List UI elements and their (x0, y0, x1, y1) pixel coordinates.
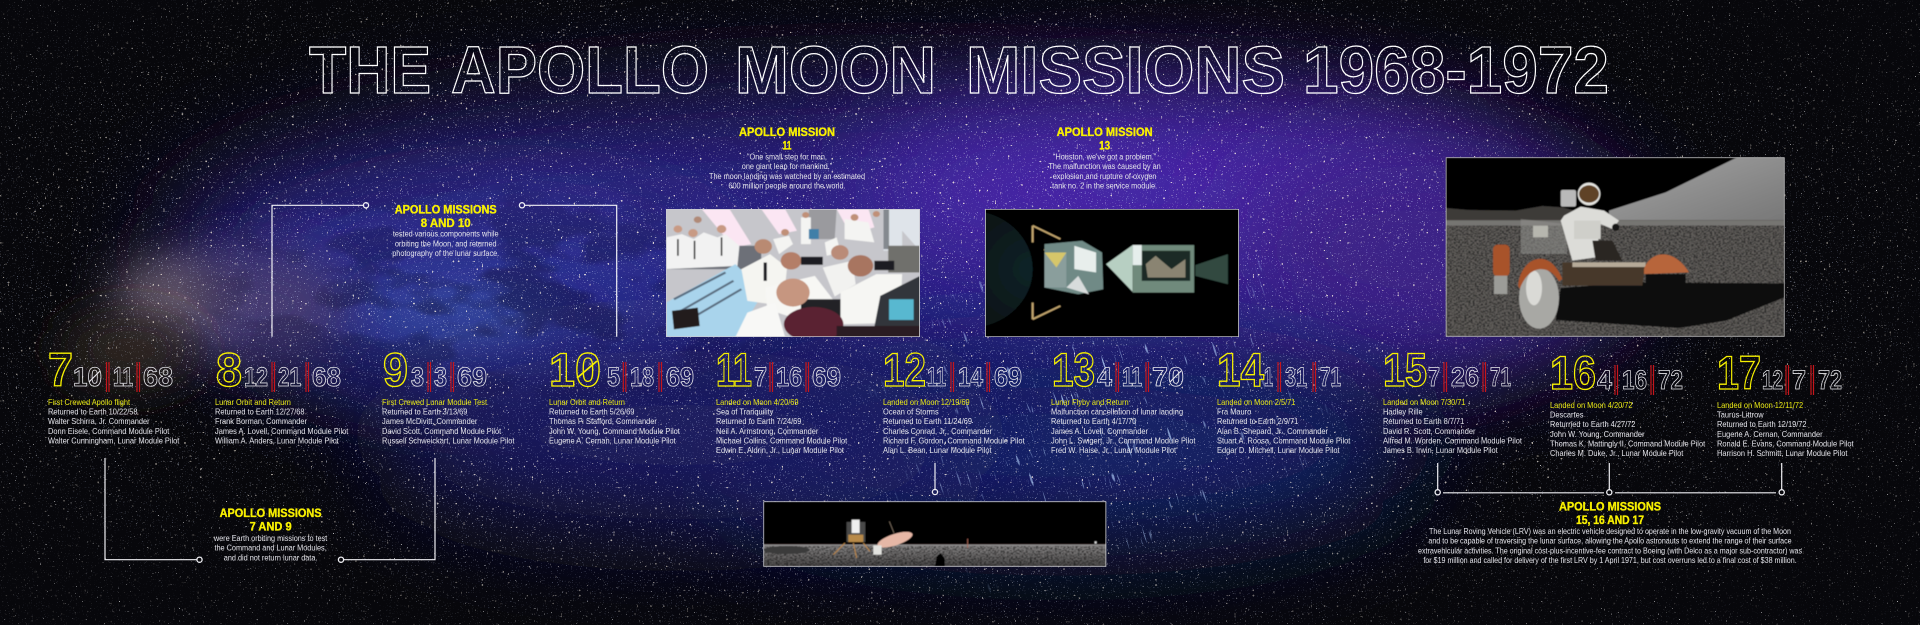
mission 9: David Scott, Command Module Pilot (382, 426, 502, 436)
mission 12: Landed on Moon 12/19/69 (883, 397, 970, 407)
mission 17: 17 (1717, 346, 1761, 399)
callout: Apollo mission 11: one giant leap for mankind.” (742, 162, 832, 171)
mission 13: Returned to Earth 4/17/70 (1051, 417, 1137, 426)
mission 7: 7 (48, 343, 73, 396)
mission 10: 18 (630, 362, 654, 392)
mission 12: 69 (994, 362, 1022, 392)
mission 8: William A. Anders, Lunar Module Pilot (215, 436, 339, 446)
mission 14: Returned to Earth 2/9/71 (1217, 417, 1299, 426)
mission 12: Returned to Earth 11/24/69 (883, 417, 972, 426)
callout: Apollo mission 11: 11 (782, 139, 792, 152)
callout: Apollo mission 13: explosion and rupture of oxygen (1053, 171, 1156, 181)
mission 16: Thomas K. Mattingly II, Command Module Pilot (1550, 439, 1706, 449)
mission 12: Charles Conrad, Jr., Commander (883, 426, 992, 436)
mission 15: Alfred M. Worden, Command Module Pilot (1383, 436, 1523, 446)
mission 14: 71 (1320, 362, 1341, 392)
mission 14: 1 (1264, 362, 1273, 392)
mission 10 (549, 343, 694, 446)
mission 12: 11 (927, 362, 946, 392)
mission 11 (716, 343, 848, 455)
mission 9: James McDivitt, Commander (382, 417, 478, 426)
callout: Apollo missions 15, 16 and 17: The Lunar Roving Vehicle (LRV) was an electric vehicle designed to operate in the low-gravity vacuum of the Moon (1429, 526, 1791, 536)
mission 10: 69 (666, 362, 694, 392)
mission 8: Frank Borman, Commander (215, 417, 307, 426)
mission 17: Harrison H. Schmitt, Lunar Module Pilot (1717, 448, 1848, 458)
mission 9: First Crewed Lunar Module Test (382, 397, 488, 407)
connector: missions 8 and 10 (272, 203, 617, 337)
mission 13: Fred W. Haise, Jr., Lunar Module Pilot (1051, 445, 1177, 455)
mission 11: Sea of Tranquility (716, 407, 774, 417)
mission 16: 4 (1597, 365, 1612, 395)
mission 16: Returned to Earth 4/27/72 (1550, 420, 1636, 429)
callout: Apollo mission 11: APOLLO MISSION (739, 126, 835, 139)
callout: Apollo mission 11: “One small step for man, (747, 152, 827, 162)
mission 15: Returned to Earth 8/7/71 (1383, 417, 1465, 426)
photo: astronaut on lunar rover (1446, 157, 1785, 337)
mission 13: James A. Lovell, Commander (1051, 426, 1148, 436)
mission 15: James B. Irwin, Lunar Module Pilot (1383, 445, 1498, 455)
mission 7: 11 (113, 362, 133, 392)
mission 17: 7 (1792, 365, 1806, 395)
mission 12: 14 (958, 362, 983, 392)
mission 7: Returned to Earth 10/22/58 (48, 407, 138, 417)
callout: Apollo missions 7 and 9: and did not return lunar data. (224, 553, 317, 562)
mission 14: 31 (1285, 362, 1307, 392)
mission 9: 9 (383, 343, 408, 396)
mission 7: Walter Cunningham, Lunar Module Pilot (48, 436, 180, 446)
title: 1968-1972 (1303, 33, 1609, 108)
mission 15: 15 (1383, 343, 1427, 396)
title: THE (309, 33, 431, 108)
mission 17: 72 (1818, 365, 1842, 395)
connector: missions 7 and 9 (105, 458, 435, 562)
mission 8 (215, 343, 349, 446)
mission 14: Fra Mauro (1217, 407, 1252, 417)
mission 17: Returned to Earth 12/19/72 (1717, 420, 1807, 429)
mission 7: First Crewed Apollo flight (48, 397, 131, 407)
mission 16 (1550, 346, 1706, 458)
mission 17: Eugene A. Cernan, Commander (1717, 429, 1823, 439)
mission 8: 12 (244, 362, 268, 392)
mission 12: Richard F. Gordon, Command Module Pilot (883, 436, 1025, 446)
mission 15: Landed on Moon 7/30/71 (1383, 397, 1466, 407)
callout: Apollo mission 13: APOLLO MISSION (1057, 126, 1153, 139)
mission 7: Walter Schirra, Jr. Commander (48, 417, 150, 426)
mission 9 (382, 343, 515, 446)
mission 16: 16 (1622, 365, 1647, 395)
mission 13: 11 (1122, 362, 1142, 392)
mission 9: Russell Schweickart, Lunar Module Pilot (382, 436, 515, 446)
callout: Apollo missions 8 and 10: tested various components while (393, 229, 499, 239)
mission 12 (883, 343, 1025, 455)
callout: Apollo missions 7 and 9: were Earth orbiting missions to test (213, 533, 328, 543)
mission 16: 16 (1550, 346, 1596, 399)
callout: Apollo missions 15, 16 and 17 (1418, 500, 1802, 565)
callout: Apollo missions 8 and 10: photography of the lunar surface. (392, 249, 499, 258)
mission 11: Returned to Earth 7/24/69 (716, 417, 802, 426)
mission 9: 3 (411, 362, 424, 392)
callout: Apollo missions 15, 16 and 17: for $19 million and called for delivery of the first LRV by 1 April 1971, but cost overruns led to a final cost of $38 million. (1423, 555, 1797, 565)
mission 16: Descartes (1550, 410, 1583, 420)
callout: Apollo mission 13: tank no. 2 in the service module. (1052, 181, 1157, 191)
mission 8: James A. Lovell, Command Module Pilot (215, 426, 349, 436)
callout: Apollo missions 8 and 10: 8 AND 10 (421, 217, 471, 230)
mission 16: Charles M. Duke, Jr., Lunar Module Pilot (1550, 448, 1684, 458)
mission 11: Landed on Moon 4/20/69 (716, 397, 799, 407)
connector: missions 15, 16 and 17 (1435, 463, 1784, 495)
mission 14: Edgar D. Mitchell, Lunar Module Pilot (1217, 445, 1340, 455)
mission 13: 13 (1052, 343, 1095, 396)
mission 7: 68 (143, 362, 173, 392)
callout: Apollo mission 11: 600 million people around the world. (728, 181, 846, 191)
callout: Apollo missions 15, 16 and 17: APOLLO MISSIONS (1559, 500, 1661, 513)
mission 15: 71 (1490, 362, 1511, 392)
title: MISSIONS (966, 33, 1285, 108)
mission 11: Edwin E. Aldrin, Jr., Lunar Module Pilot (716, 445, 845, 455)
mission 14: 14 (1217, 343, 1264, 396)
mission 16: John W. Young, Commander (1550, 429, 1645, 439)
mission 15: 26 (1451, 362, 1479, 392)
mission 10: Returned to Earth 5/26/69 (549, 407, 635, 417)
mission 13: 4 (1097, 362, 1112, 392)
callout: Apollo missions 15, 16 and 17: and to be capable of traversing the lunar surface, allowing the Apollo astronauts to extend the range of their surface (1428, 536, 1792, 546)
mission 13: Malfunction cancellation of lunar landing (1051, 407, 1183, 417)
mission 13: 70 (1152, 362, 1184, 392)
photo: Apollo spacecraft illustration (985, 209, 1239, 337)
mission 7 (48, 343, 180, 446)
mission 17: Taurus-Littrow (1717, 410, 1764, 420)
mission 12: Alan L. Bean, Lunar Module Pilot (883, 445, 992, 455)
mission 15: David R. Scott, Commander (1383, 426, 1476, 436)
mission 17: 12 (1762, 365, 1783, 395)
connector: mission 12 to panorama (932, 463, 938, 495)
mission 10: 5 (607, 362, 620, 392)
mission 15: Hadley Rille (1383, 407, 1423, 417)
mission 11: 11 (716, 343, 752, 396)
mission 10: Eugene A. Cernan, Lunar Module Pilot (549, 436, 676, 446)
mission 8: Returned to Earth 12/27/68 (215, 407, 305, 417)
photo: lunar panorama with lander (763, 501, 1106, 567)
callout: Apollo missions 7 and 9 (213, 507, 328, 562)
callout: Apollo mission 13: 13 (1099, 139, 1111, 152)
mission 13: Lunar Flyby and Return (1051, 397, 1129, 407)
title (309, 33, 1609, 108)
mission 10: Thomas P. Stafford, Commander (549, 417, 657, 426)
callout: Apollo missions 15, 16 and 17: extravehicular activities. The original cost-plus-incentive-fee contract to Boeing (with Delco as a major sub-contractor) was (1418, 546, 1802, 555)
mission 17 (1717, 346, 1854, 458)
mission 11: 7 (754, 362, 767, 392)
mission 11: 69 (812, 362, 841, 392)
mission 13 (1051, 343, 1196, 455)
mission 9: 3 (434, 362, 447, 392)
mission 16: 72 (1658, 365, 1683, 395)
callout: Apollo missions 7 and 9: 7 AND 9 (250, 521, 292, 534)
callout: Apollo missions 7 and 9: APOLLO MISSIONS (220, 507, 322, 520)
mission 16: Landed on Moon 4/20/72 (1550, 400, 1633, 410)
mission 17: Ronald E. Evans, Command Module Pilot (1717, 439, 1854, 449)
mission 10: Lunar Orbit and Return (549, 397, 625, 407)
callout: Apollo mission 13: The malfunction was caused by an (1048, 162, 1161, 171)
mission 15: 7 (1428, 362, 1440, 392)
mission 7: 10 (73, 362, 102, 392)
mission 8: Lunar Orbit and Return (215, 397, 291, 407)
photo: firing room during Apollo 11 launch (666, 209, 920, 337)
mission 8: 8 (216, 343, 242, 396)
callout: Apollo mission 11 (709, 126, 865, 191)
mission 12: Ocean of Storms (883, 407, 939, 417)
mission 11: Michael Collins, Command Module Pilot (716, 436, 848, 446)
title: APOLLO (451, 33, 709, 108)
callout: Apollo missions 7 and 9: the Command and Lunar Modules, (214, 543, 327, 553)
callout: Apollo mission 13 (1048, 126, 1161, 191)
mission 8: 21 (278, 362, 301, 392)
mission 10: 10 (549, 343, 601, 396)
mission 9: Returned to Earth 3/13/69 (382, 407, 468, 417)
mission 14: Landed on Moon 2/5/71 (1217, 397, 1296, 407)
mission 15 (1383, 343, 1523, 455)
mission 7: Donn Eisele, Command Module Pilot (48, 426, 170, 436)
mission 14: Stuart A. Roosa, Command Module Pilot (1217, 436, 1351, 446)
callout: Apollo mission 13: “Houston, we've got a problem.” (1053, 152, 1156, 162)
mission 10: John W. Young, Command Module Pilot (549, 426, 681, 436)
callout: Apollo missions 8 and 10 (392, 203, 499, 258)
mission 11: Neil A. Armstrong, Commander (716, 426, 819, 436)
mission 11: 16 (776, 362, 802, 392)
mission 13: John L. Swigert, Jr., Command Module Pilot (1051, 436, 1196, 446)
mission 14: Alan B. Shepard, Jr., Commander (1217, 426, 1328, 436)
callout: Apollo missions 15, 16 and 17: 15, 16 AND 17 (1576, 514, 1644, 527)
callout: Apollo mission 11: The moon landing was watched by an estimated (709, 171, 865, 181)
title: MOON (735, 33, 936, 108)
mission 12: 12 (883, 343, 926, 396)
callout: Apollo missions 8 and 10: orbiting the Moon, and returned (395, 239, 497, 249)
mission 8: 68 (312, 362, 341, 392)
mission 9: 69 (457, 362, 487, 392)
callout: Apollo missions 8 and 10: APOLLO MISSIONS (395, 203, 497, 216)
mission 17: Landed on Moon 12/11/72 (1717, 400, 1804, 410)
mission 14 (1217, 343, 1351, 455)
